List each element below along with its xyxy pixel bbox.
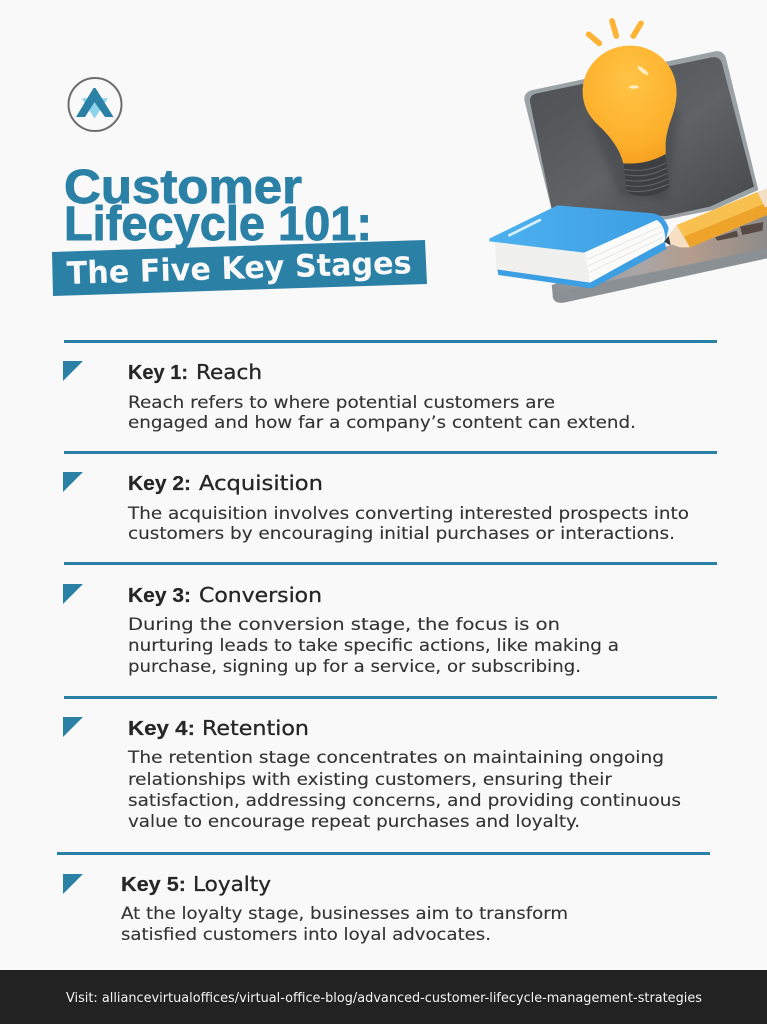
heading: Key 1: [128, 361, 188, 384]
subtitle banner: The Five Key Stages [66, 245, 412, 292]
body text: value to encourage repeat purchases and loyalty. [128, 812, 580, 831]
footer link text: Visit: alliancevirtualoffices/virtual-office-blog/advanced-customer-lifecycle-management-strategies [66, 991, 702, 1006]
heading: Conversion [199, 583, 322, 607]
title [64, 161, 372, 251]
marker triangle [63, 361, 83, 381]
heading [128, 360, 262, 384]
section: Key 3 Conversion [63, 562, 717, 676]
back cover [497, 242, 666, 288]
bulb shadow [590, 110, 680, 200]
body text: relationships with existing customers, ensuring their [128, 770, 612, 789]
section: Key 5 Loyalty [57, 852, 710, 944]
section: Key 1 Reach [63, 340, 717, 432]
marker triangle [63, 584, 83, 604]
body text: The retention stage concentrates on maintaining ongoing [127, 748, 664, 767]
body text: At the loyalty stage, businesses aim to transform [121, 904, 568, 923]
front cover [489, 205, 669, 253]
laptop screen [524, 51, 758, 223]
heading [128, 583, 322, 607]
pencil [664, 188, 767, 247]
body text [127, 504, 689, 543]
heading: Acquisition [199, 471, 323, 495]
illustration: laptop, light bulb, book and pencil [489, 21, 767, 303]
body text: Reach refers to where potential customers are [128, 393, 555, 412]
heading: Key 2: [128, 472, 191, 495]
heading: Key 5: [121, 873, 186, 896]
bulb glass [583, 46, 677, 164]
marker triangle [63, 717, 83, 737]
heading: Key 4: [128, 717, 195, 740]
body text: During the conversion stage, the focus is on [128, 615, 560, 634]
body text [128, 393, 636, 432]
marker triangle [63, 874, 83, 894]
light rays [589, 21, 641, 43]
body text [128, 615, 619, 676]
title: Lifecycle 101: [64, 198, 372, 251]
footer [0, 970, 767, 1024]
title: Customer [64, 161, 302, 214]
book [489, 205, 669, 288]
bulb highlights [629, 65, 649, 89]
logo [68, 78, 122, 131]
section: Key 2 Acquisition [63, 451, 717, 543]
heading [128, 716, 309, 740]
laptop base [552, 213, 767, 303]
heading: Retention [202, 716, 309, 740]
heading [121, 872, 271, 896]
marker triangle [63, 472, 83, 492]
heading: Key 3: [128, 584, 191, 607]
section: Key 4 Retention [63, 696, 717, 831]
body text: satisfied customers into loyal advocates. [121, 925, 491, 944]
body text: nurturing leads to take specific actions, like making a [128, 636, 619, 655]
body text [121, 904, 568, 944]
body text: satisfaction, addressing concerns, and providing continuous [128, 791, 681, 810]
body text [127, 748, 681, 831]
heading: Reach [196, 360, 262, 384]
body text: customers by encouraging initial purchases or interactions. [128, 524, 675, 543]
body text: purchase, signing up for a service, or subscribing. [128, 657, 581, 676]
body text: The acquisition involves converting interested prospects into [127, 504, 689, 523]
body text: engaged and how far a company’s content can extend. [128, 413, 636, 432]
heading: Loyalty [193, 872, 271, 896]
heading [128, 471, 323, 495]
bulb socket [623, 153, 669, 196]
pages [495, 219, 664, 283]
